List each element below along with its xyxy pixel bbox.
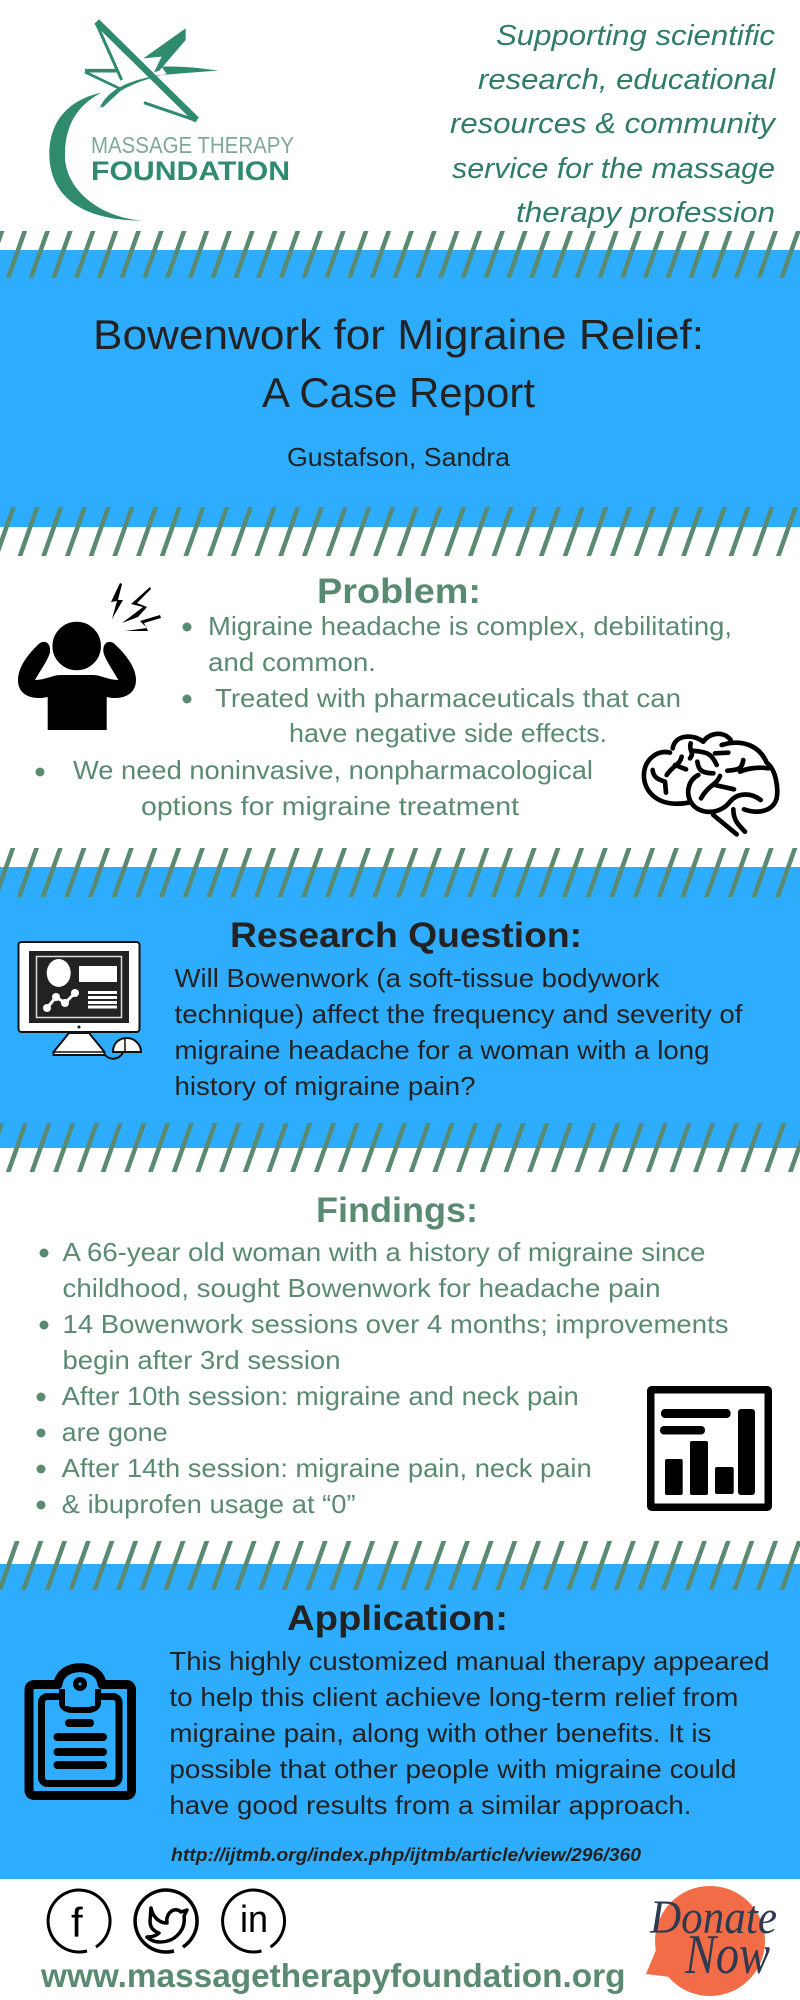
text block: research question: technique) affect the frequency and severity of xyxy=(174,999,743,1029)
icon: brain xyxy=(644,734,777,834)
icon: clipboard xyxy=(29,1668,132,1796)
icon: star and crescent xyxy=(49,22,218,221)
icon: linkedin: in xyxy=(240,1899,268,1941)
tagline: resources & community xyxy=(450,108,777,140)
panel: application band xyxy=(0,1564,800,1879)
title: A Case Report xyxy=(262,369,535,416)
panel: research question band xyxy=(0,867,800,1148)
heading: Problem: Problem: xyxy=(317,572,481,611)
text block: findings bullets: are gone xyxy=(62,1417,168,1447)
text block: findings bullets: A 66-year old woman with a history of migraine since xyxy=(62,1237,705,1267)
icon: person with headache xyxy=(18,583,161,730)
logo wordmark: MASSAGE THERAPY xyxy=(91,132,294,158)
text block: problem bullets: options for migraine treatment xyxy=(141,791,520,821)
website url: www.massagetherapyfoundation.org xyxy=(40,1957,625,1994)
text block: problem bullets: Treated with pharmaceuticals that can xyxy=(215,683,681,713)
donate now speech bubble: Now xyxy=(684,1924,770,1986)
text block: application: possible that other people with migraine could xyxy=(169,1754,736,1784)
text block: application: This highly customized manual therapy appeared xyxy=(169,1646,769,1676)
text block: research question: Will Bowenwork (a soft-tissue bodywork xyxy=(174,963,661,993)
text block: application: migraine pain, along with other benefits. It is xyxy=(169,1718,711,1748)
citation link: http://ijtmb.org/index.php/ijtmb/article/view/296/360 xyxy=(171,1845,641,1865)
heading: Research Question: Research Question: xyxy=(230,916,582,955)
tagline: service for the massage xyxy=(452,153,775,185)
tagline: therapy profession xyxy=(516,197,775,229)
heading: Application: Application: xyxy=(287,1599,508,1638)
text block: problem bullets: have negative side effects. xyxy=(289,718,607,748)
tagline xyxy=(450,20,777,229)
text block: problem bullets xyxy=(36,611,732,821)
icon: linkedin xyxy=(223,1890,285,1952)
text block: research question: migraine headache for a woman with a long xyxy=(174,1035,710,1065)
icon: twitter xyxy=(135,1890,197,1952)
panel: title band xyxy=(0,250,800,527)
icon: bar chart xyxy=(651,1390,768,1507)
text block: application: have good results from a similar approach. xyxy=(169,1790,691,1820)
logo: Massage Therapy Foundation xyxy=(49,22,294,221)
text block: research question: history of migraine pain? xyxy=(174,1071,476,1101)
logo wordmark: FOUNDATION xyxy=(91,156,290,186)
text block: application xyxy=(169,1646,769,1820)
text block: findings bullets: childhood, sought Bowenwork for headache pain xyxy=(62,1273,660,1303)
text block: problem bullets: and common. xyxy=(208,647,376,677)
text block: problem bullets: Migraine headache is complex, debilitating, xyxy=(208,611,732,641)
text block: findings bullets: & ibuprofen usage at “0” xyxy=(62,1489,356,1519)
title: Bowenwork for Migraine Relief: xyxy=(93,311,704,358)
donate now speech bubble: Donate xyxy=(649,1891,777,1944)
logo wordmark xyxy=(91,132,294,186)
icon: computer monitor xyxy=(18,942,141,1059)
text block: application: to help this client achieve long-term relief from xyxy=(169,1682,738,1712)
tagline: Supporting scientific xyxy=(496,20,776,52)
text block: findings bullets: After 10th session: migraine and neck pain xyxy=(62,1381,579,1411)
text block: findings bullets: begin after 3rd session xyxy=(62,1345,340,1375)
icon: facebook xyxy=(48,1890,110,1952)
text block: problem bullets: We need noninvasive, nonpharmacological xyxy=(73,755,593,785)
donate now speech bubble xyxy=(646,1886,777,1996)
heading: Findings: Findings: xyxy=(316,1191,478,1230)
text block: findings bullets: 14 Bowenwork sessions over 4 months; improvements xyxy=(62,1309,728,1339)
title xyxy=(93,311,704,416)
text block: research question xyxy=(174,963,743,1101)
text block: findings bullets xyxy=(36,1237,728,1519)
tagline: research, educational xyxy=(478,64,777,96)
icon: facebook: f xyxy=(71,1899,83,1946)
text block: findings bullets: After 14th session: migraine pain, neck pain xyxy=(62,1453,592,1483)
author: Gustafson, Sandra xyxy=(287,442,511,472)
